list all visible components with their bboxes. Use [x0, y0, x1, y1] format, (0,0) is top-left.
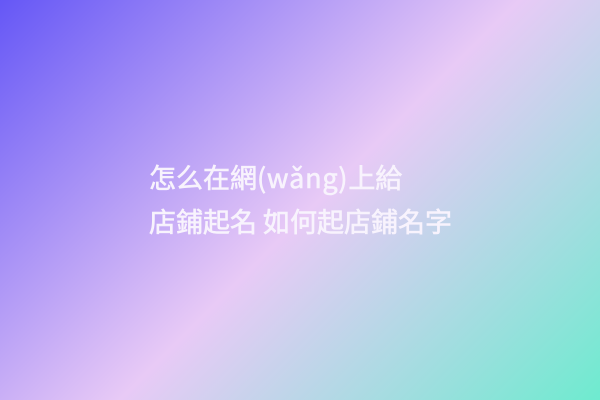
title: 怎么在網(wǎng)上給 [149, 157, 402, 196]
title [149, 157, 452, 240]
title: 店鋪起名 如何起店鋪名字 [149, 201, 452, 240]
